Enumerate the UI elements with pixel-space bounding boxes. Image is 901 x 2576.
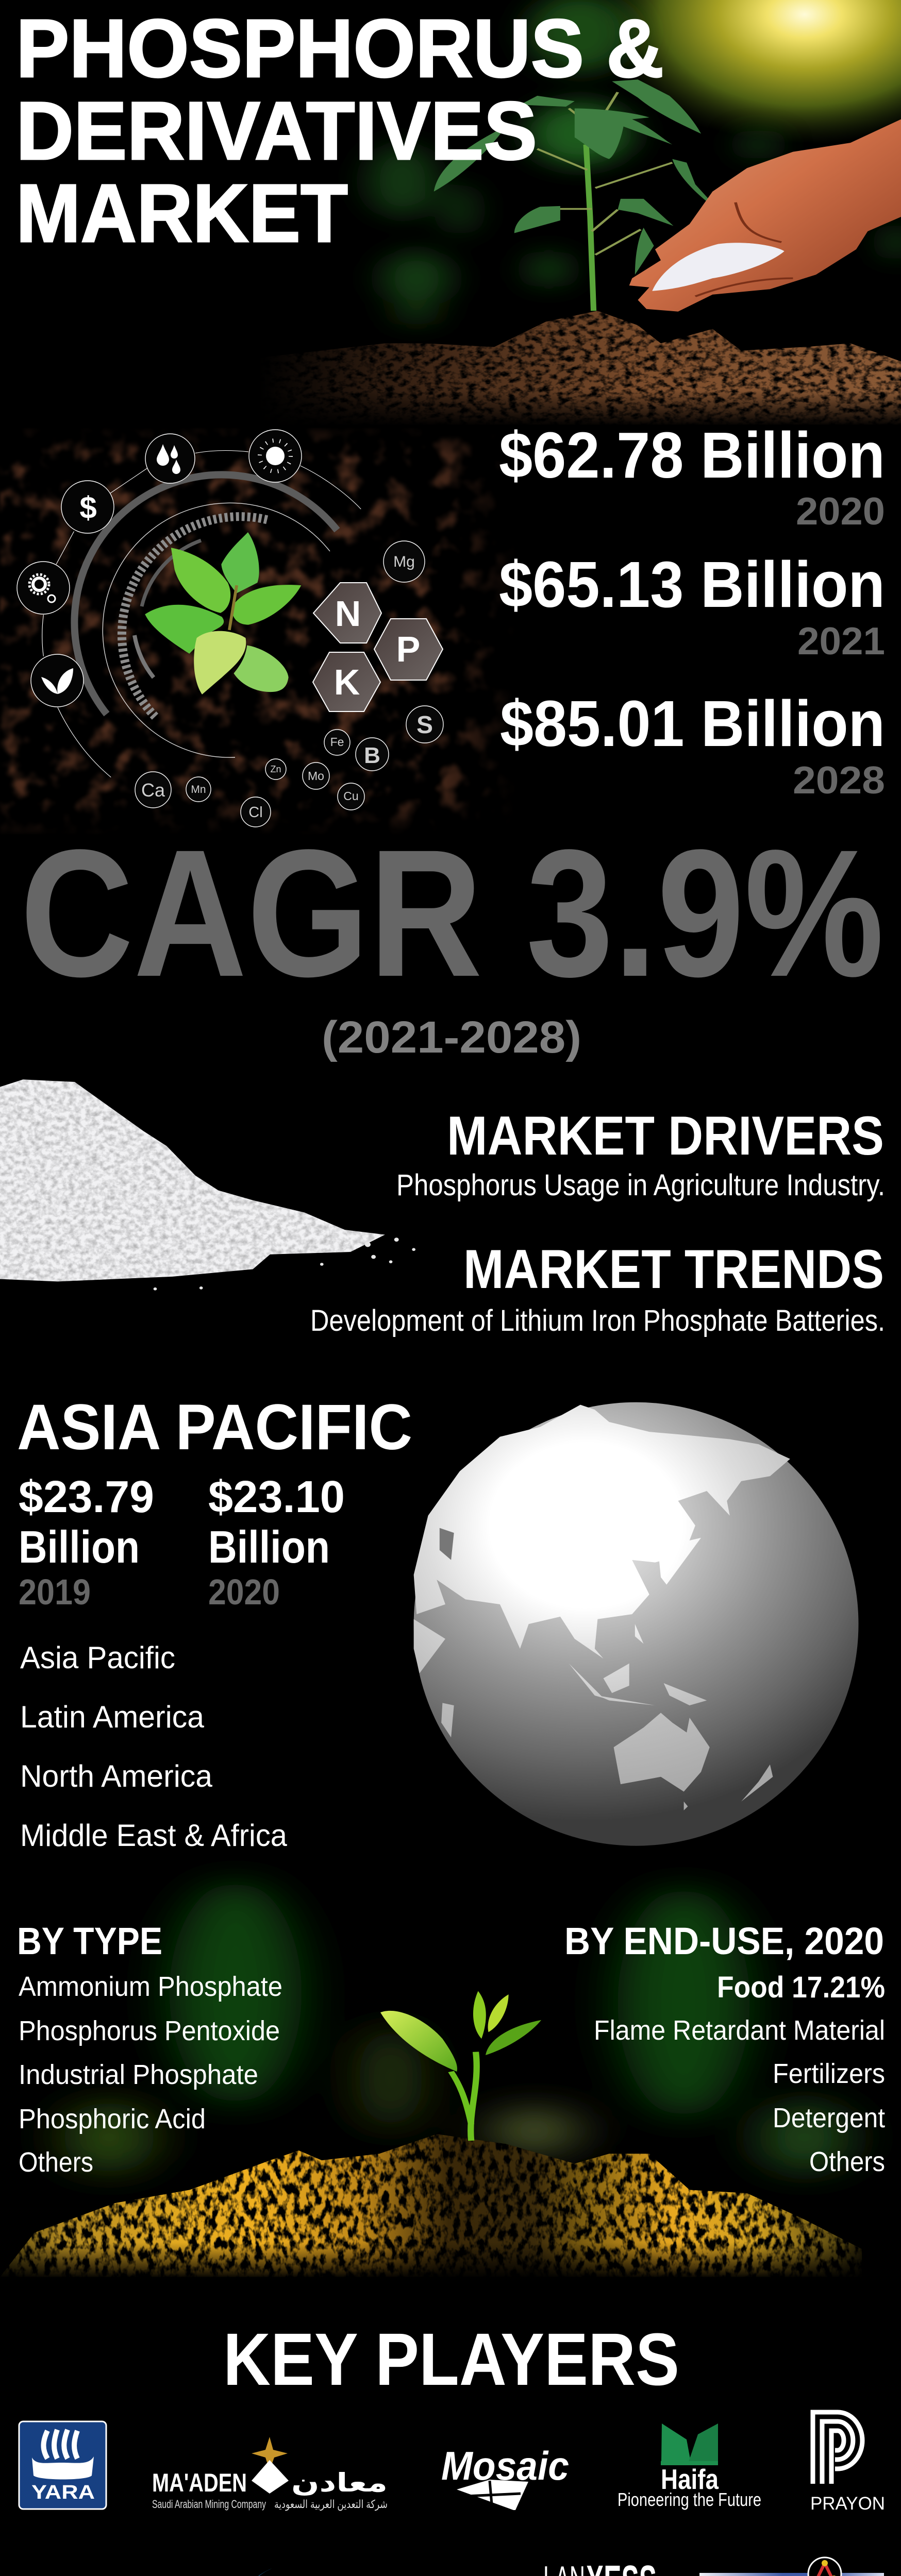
hand holding fertilizer [629, 119, 901, 312]
element labels: Mg [393, 553, 415, 570]
by type segment list: Phosphoric Acid [19, 2104, 206, 2134]
logo: Haifa: Pioneering the Future [618, 2489, 761, 2510]
title: DERIVATIVES [16, 84, 537, 177]
sunlight and blurred foliage [368, 0, 901, 325]
element labels: Cl [248, 804, 263, 821]
regional values: Billion [19, 1521, 140, 1572]
market trends [310, 1238, 885, 1337]
regional heading: ASIA PACIFIC [17, 1392, 412, 1463]
globe [414, 1402, 859, 1846]
logo: Lanxess [543, 2556, 657, 2576]
regional values: $23.10 [208, 1472, 345, 1522]
by end-use segment list: Others [809, 2146, 885, 2177]
by end-use segment list: Flame Retardant Material [594, 2015, 885, 2046]
hexagon N: N [335, 594, 361, 634]
icon: dollar [61, 481, 114, 533]
icon: gears [17, 562, 70, 614]
logo: Ma'aden: شركة التعدين العربية السعودية [274, 2498, 388, 2511]
icon: leaf [31, 654, 84, 707]
element labels: Ca [141, 779, 165, 801]
by type segment list: Others [19, 2147, 93, 2178]
hexagon P: P [396, 629, 420, 669]
title [16, 2, 664, 259]
soil mound [0, 2134, 901, 2279]
region list: North America [20, 1759, 213, 1793]
soil mound [253, 311, 901, 427]
logo: Mosaic: Mosaic [441, 2443, 569, 2488]
region list: Middle East & Africa [20, 1818, 288, 1853]
element badges [135, 541, 443, 827]
logo: Haifa: Haifa [661, 2463, 719, 2495]
element labels: Mn [191, 784, 206, 795]
region list [20, 1640, 288, 1853]
element labels: S [416, 711, 433, 739]
logo: Yara: YARA [31, 2482, 95, 2503]
element labels: Fe [330, 735, 344, 749]
by type segment list: Ammonium Phosphate [19, 1971, 282, 2002]
by end-use segment list: Detergent [773, 2103, 885, 2133]
logo: Ma'aden: معادن [291, 2468, 388, 2497]
by type segment list: BY TYPE [17, 1920, 162, 1962]
hexagon K [313, 652, 380, 711]
blurred green backdrop [63, 1881, 850, 2174]
plant seedling [434, 79, 719, 311]
element labels: Zn [270, 764, 281, 774]
by end-use segment list: Food 17.21% [717, 1971, 885, 2004]
icon: dollar: $ [79, 490, 97, 525]
logo: Haifa [618, 2424, 761, 2510]
nutrient graphic: plant, icon ring and element badges [0, 425, 518, 837]
icon: sun [249, 430, 302, 482]
market drivers [396, 1105, 885, 1202]
logo: Prayon: PRAYON [810, 2494, 885, 2514]
logo: Italmatch Chemicals [699, 2557, 884, 2576]
by type segment list [17, 1920, 282, 2178]
regional values: $23.79 [19, 1472, 154, 1522]
region list: Latin America [20, 1700, 205, 1734]
by type segment list: Phosphorus Pentoxide [19, 2015, 280, 2046]
title: MARKET [16, 167, 348, 259]
by end-use segment list: Fertilizers [773, 2058, 885, 2089]
hero image: plant, hand and soil [253, 0, 901, 427]
logo: Prayon [810, 2412, 885, 2514]
regional values: Billion [208, 1521, 330, 1572]
element labels: B [364, 743, 380, 768]
by type segment list: Industrial Phosphate [19, 2059, 258, 2090]
market size values: 2020 [796, 489, 885, 533]
salt pile image [0, 1079, 415, 1291]
logo: Ma'aden: MA'ADEN [152, 2468, 247, 2497]
market size values [499, 419, 885, 802]
key players heading: KEY PLAYERS [223, 2318, 679, 2401]
connector lines and rings [42, 451, 361, 777]
market size values: 2028 [793, 758, 885, 802]
by end-use segment list: BY END-USE, 2020 [564, 1920, 884, 1962]
seedling section background and soil [0, 1881, 901, 2279]
central plant leaves [145, 532, 301, 694]
element labels: Mo [308, 769, 324, 783]
icon: water drops [145, 434, 195, 483]
hexagon K: K [334, 662, 360, 702]
CAGR period: (2021-2028) [322, 1012, 581, 1062]
hexagon N [313, 583, 381, 643]
hexagon P [374, 619, 443, 680]
logo: Yara [19, 2421, 106, 2509]
element labels: Cu [343, 789, 359, 803]
regional values [19, 1472, 345, 1612]
regional values: 2019 [19, 1572, 91, 1612]
logo: Ma'aden [152, 2437, 388, 2511]
element labels [141, 553, 433, 821]
logo: Ma'aden: Saudi Arabian Mining Company [152, 2498, 266, 2511]
logo: Solvay [235, 2568, 379, 2576]
regional values: 2020 [208, 1572, 280, 1612]
logo: Mosaic [441, 2443, 569, 2510]
by end-use segment list [564, 1920, 885, 2177]
seedling [380, 1991, 541, 2141]
title: PHOSPHORUS & [16, 2, 664, 94]
market size values: 2021 [797, 619, 885, 663]
region list: Asia Pacific [20, 1640, 175, 1675]
